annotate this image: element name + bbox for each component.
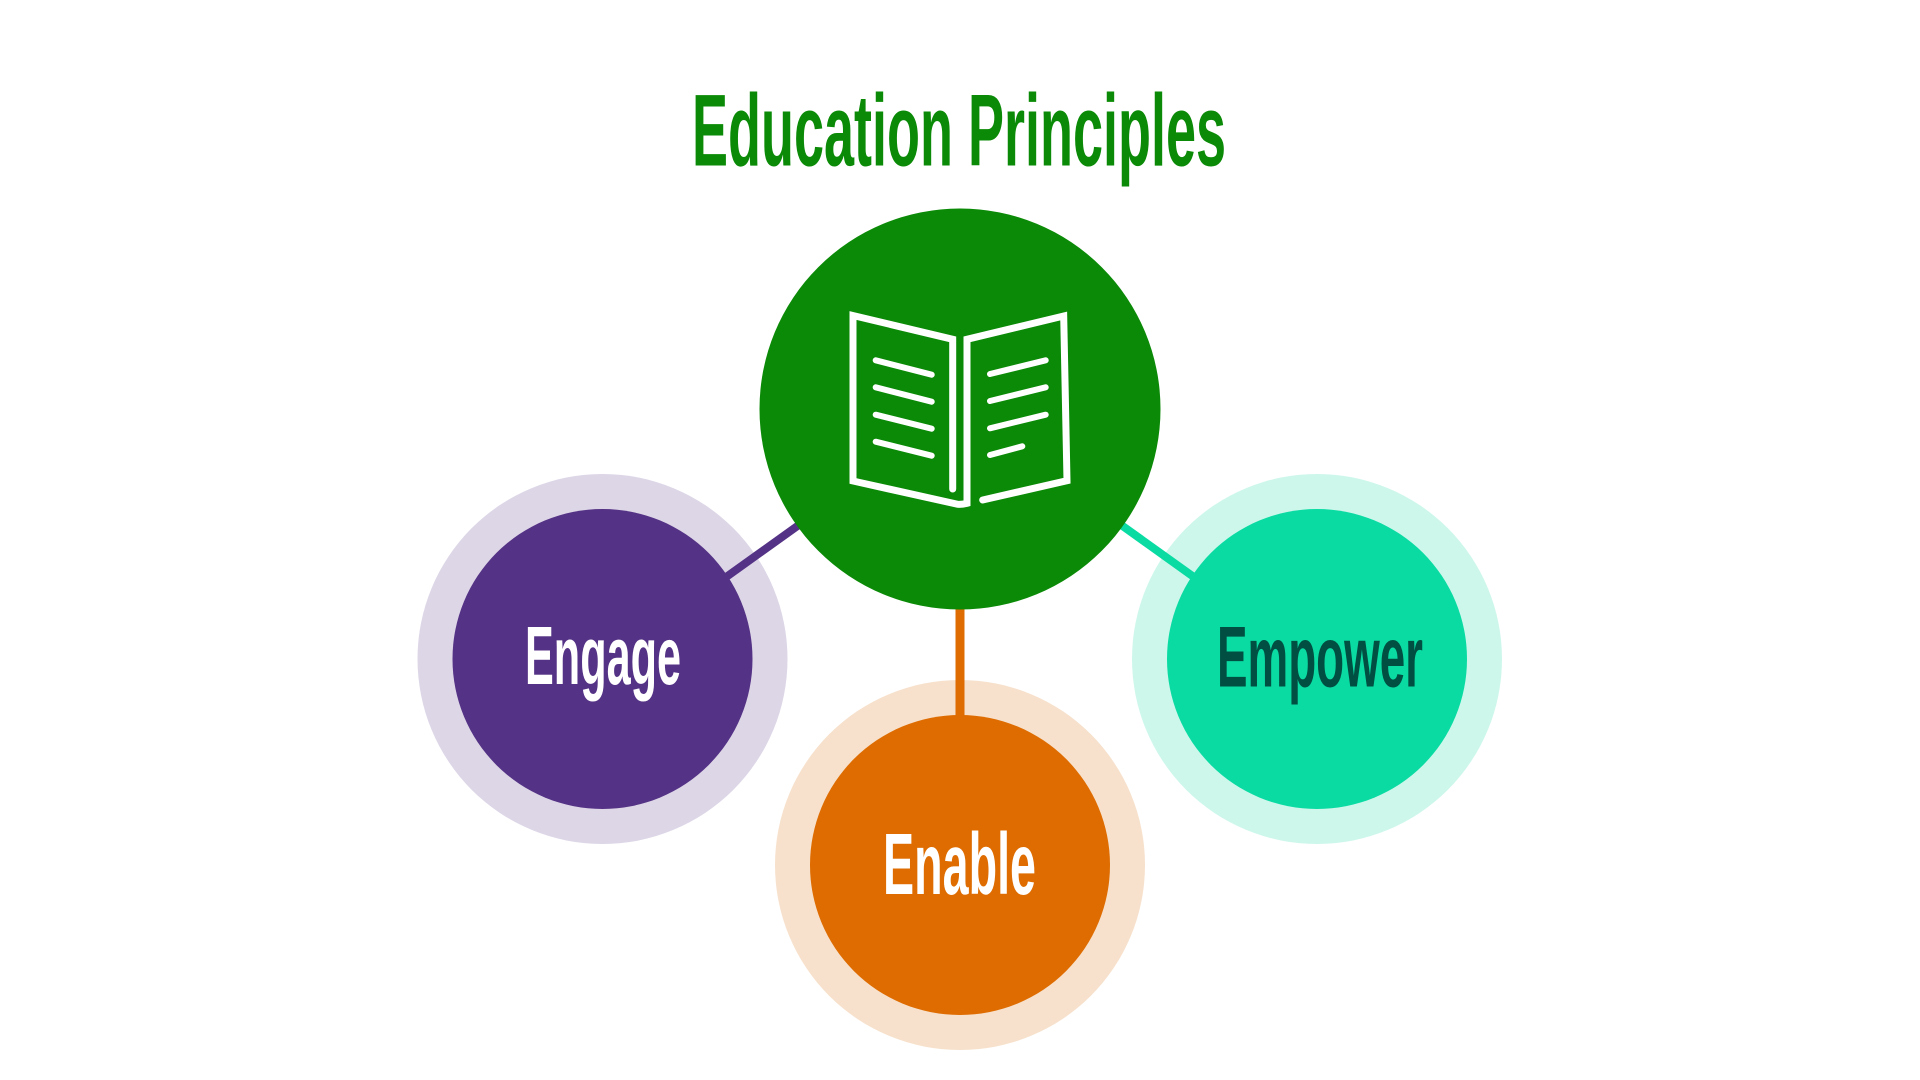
node: empower: [1110, 474, 1502, 844]
connector: engage: [715, 517, 810, 585]
central circle: [760, 208, 1160, 610]
title: Education Principles: [692, 74, 1226, 188]
node: engage: [418, 474, 810, 844]
connector: empower: [1110, 517, 1205, 585]
node: enable: [775, 600, 1145, 1050]
node: empower: Empower: [1217, 610, 1423, 706]
node: engage: Engage: [525, 609, 681, 702]
connector: enable: [956, 600, 964, 725]
node: enable: Enable: [883, 816, 1036, 913]
icon: open book: [853, 316, 1067, 504]
